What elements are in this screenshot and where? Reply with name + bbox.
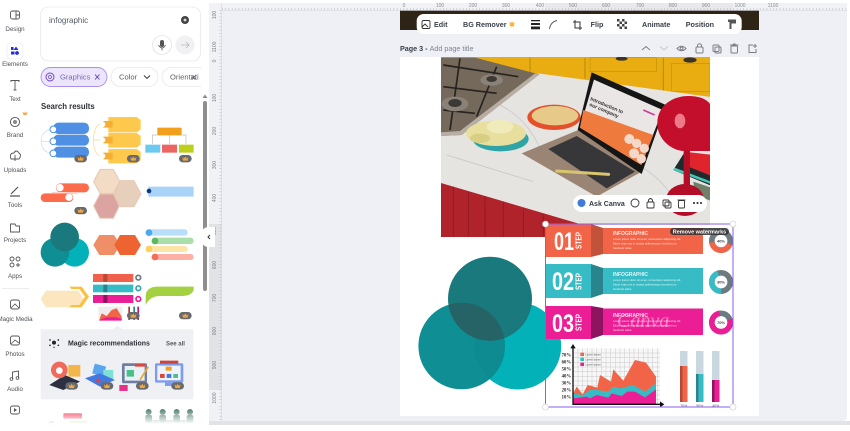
icon: magic sparkle — [49, 339, 59, 348]
left ruler: 200 — [212, 127, 218, 135]
heading: search results: Search results — [41, 102, 95, 111]
panel: magic recommendations — [41, 326, 193, 399]
donut 30%: 30% — [717, 280, 725, 284]
chart legend: Lorem Ipsum — [585, 352, 602, 356]
step 2 banner: INFOGRAPHIC — [613, 272, 648, 278]
top ruler: 800 — [669, 3, 677, 9]
floating toolbar: Animate — [642, 20, 670, 29]
chips plate — [466, 120, 529, 151]
chart legend — [580, 352, 602, 366]
red lamp — [657, 96, 713, 216]
chip: orientation: Orientati — [170, 72, 199, 82]
donut 40%: 40% — [717, 238, 725, 244]
top ruler: 200 — [469, 3, 477, 9]
step 2 banner: STEP — [574, 272, 584, 290]
chip: graphics: Graphics — [60, 72, 91, 82]
left ruler: 100 — [212, 11, 218, 19]
left ruler: 300 — [212, 161, 218, 169]
nav: text: Text — [9, 96, 21, 103]
icon: transparency — [617, 19, 627, 29]
left ruler — [209, 3, 222, 421]
nav: design: Design — [5, 26, 25, 33]
chart y axis labels: 30% — [562, 382, 571, 387]
previous page strip — [400, 11, 759, 30]
left ruler: 700 — [212, 294, 218, 302]
gas stove — [440, 58, 539, 136]
donut 70% — [709, 311, 733, 334]
ask canva toolbar — [573, 195, 707, 212]
search box: infographic — [49, 16, 88, 25]
thumbnail: blue list — [41, 123, 89, 162]
step 1 banner: 01 — [554, 228, 574, 256]
nav: photos — [5, 336, 25, 358]
step 3 banner: Etiam vitae orci in massa pellentesque hendrerit eu — [613, 324, 677, 328]
step 1 banner: hendrerit tellus. — [613, 246, 632, 250]
donut 70%: 70% — [717, 320, 725, 325]
top ruler: 500 — [569, 3, 577, 9]
recommendation: floating screens — [85, 364, 115, 390]
top ruler: 1100 — [768, 3, 779, 9]
left ruler: 100 — [212, 94, 218, 102]
top ruler: 0 — [403, 3, 406, 9]
nav: elements active: Elements — [2, 61, 28, 68]
chart y axis labels: 40% — [562, 375, 571, 380]
thumbnail: blue bar — [147, 187, 194, 197]
navigation rail — [0, 11, 33, 414]
icon: premium crown — [510, 21, 514, 26]
top ruler: 600 — [602, 3, 610, 9]
thumbnail: hex pair — [93, 235, 141, 255]
left ruler: 1100 — [212, 41, 218, 52]
top ruler: 700 — [636, 3, 644, 9]
canva watermark: Canva — [617, 310, 669, 332]
thumbnail: cropped red shapes — [49, 413, 87, 424]
left ruler: 400 — [212, 194, 218, 202]
sidebar panel — [0, 0, 209, 424]
step 1 banner — [546, 224, 703, 257]
step 2 banner: hendrerit tellus. — [613, 287, 632, 291]
icon: crop — [573, 20, 582, 30]
remove watermarks label: Remove watermarks — [673, 230, 726, 236]
donut 30% — [712, 273, 730, 291]
nav: brand: Brand — [7, 132, 24, 139]
nav: uploads — [4, 151, 26, 174]
nav: audio — [7, 371, 23, 393]
left ruler: 500 — [212, 227, 218, 235]
search result thumbnails — [41, 117, 194, 424]
panel collapse tab — [202, 227, 215, 247]
laptop — [522, 72, 666, 197]
step 3 banner: INFOGRAPHIC — [613, 313, 648, 319]
left ruler: 800 — [212, 327, 218, 335]
lower thumbnails group — [41, 223, 194, 424]
thumbnail: venn — [41, 223, 89, 267]
venn diagram — [418, 257, 561, 390]
left ruler: 600 — [212, 261, 218, 269]
step 3 banner — [546, 306, 703, 339]
chip: orientation — [162, 68, 201, 86]
step 3 banner: hendrerit tellus. — [613, 328, 632, 332]
chart y axis labels — [562, 354, 571, 401]
panel: magic recommendations: Magic recommendations — [68, 340, 150, 347]
step 3 banner: 03 — [552, 310, 574, 338]
chart y axis labels: 50% — [562, 368, 571, 373]
left ruler: 1000 — [212, 392, 218, 404]
nav: apps — [8, 257, 22, 280]
top ruler: 900 — [702, 3, 710, 9]
thumbnail: green banner — [146, 287, 194, 319]
laptop: our company — [588, 102, 620, 120]
top ruler: 1000 — [734, 3, 746, 9]
thumbnail: mini infographic — [93, 274, 141, 321]
floating toolbar: Edit — [434, 20, 448, 29]
step 1 banner: STEP — [574, 231, 584, 249]
left ruler: 900 — [212, 361, 218, 369]
nav: projects — [4, 224, 26, 244]
step 3 banner: Lorem ipsum dolor sit amet, consectetur adipiscing elit. — [613, 319, 681, 323]
popcorn plate — [527, 105, 581, 130]
chart legend: Lorem Ipsum — [585, 362, 602, 366]
step 2 banner: Etiam vitae orci in massa pellentesque hendrerit eu — [613, 282, 677, 286]
thumbnail: red pills — [41, 183, 89, 214]
recommendation: megaphone — [49, 362, 80, 390]
nav: projects: Projects — [4, 237, 26, 244]
nav: text — [9, 80, 21, 103]
step 3 banner: STEP — [574, 313, 584, 331]
chip: color: Color — [119, 72, 138, 82]
icon: corner rounding — [550, 20, 557, 29]
scrollbar — [202, 94, 208, 291]
infographic — [546, 224, 733, 408]
chart y axis labels: 20% — [562, 389, 571, 394]
thumbnail: arrow banner — [41, 287, 89, 307]
chip: graphics — [41, 68, 107, 86]
page — [400, 57, 759, 416]
thumbnail: yellow tags — [93, 117, 141, 163]
marble veins — [446, 104, 669, 192]
chart y axis labels: 70% — [562, 354, 571, 359]
bar chart: 40% — [712, 404, 719, 408]
thumbnail: hexagons — [94, 169, 141, 218]
panel: magic recommendations: See all — [166, 341, 185, 347]
nav: apps: Apps — [8, 273, 22, 280]
books — [673, 152, 710, 200]
top ruler: 100 — [436, 3, 444, 9]
icon: paint roller — [728, 20, 736, 29]
step 2 banner: Lorem ipsum dolor sit amet, consectetur adipiscing elit. — [613, 278, 681, 282]
floating toolbar: BG Remover — [463, 20, 507, 29]
nav: magic media — [0, 300, 33, 323]
thumbnail: people silhouettes — [145, 409, 193, 424]
step 2 banner — [546, 264, 703, 298]
bar chart: 50% — [696, 404, 703, 408]
selection frame — [542, 221, 736, 410]
nav: video — [10, 406, 20, 414]
red cabinet — [440, 183, 587, 238]
nav: photos: Photos — [5, 351, 25, 358]
top ruler: 400 — [536, 3, 544, 9]
nav: uploads: Uploads — [4, 167, 26, 174]
bar chart — [680, 351, 720, 408]
icon: edit image — [422, 20, 430, 28]
editor canvas background — [209, 3, 850, 425]
floating toolbar: Flip — [591, 20, 604, 29]
filter chips — [41, 68, 201, 86]
marble counter — [440, 73, 713, 225]
chart y axis labels: 60% — [562, 361, 571, 366]
step 2 banner: 02 — [552, 268, 574, 296]
page action icons — [642, 44, 757, 53]
left ruler: 0 — [212, 59, 218, 62]
donut 40% — [709, 229, 733, 253]
thumbnail: pastel pills — [146, 229, 194, 260]
chart legend: Lorem Ipsum — [585, 357, 602, 361]
ask canva toolbar: Ask Canva — [589, 201, 625, 208]
thumbnail: org chart — [145, 128, 194, 162]
floating toolbar — [417, 14, 742, 34]
chart y axis labels: 10% — [562, 396, 571, 401]
floating toolbar: Position — [686, 20, 714, 29]
nav: tools — [8, 187, 22, 209]
nav: brand — [7, 111, 28, 139]
nav: elements active — [2, 43, 28, 68]
icon: stroke style — [531, 20, 540, 29]
top ruler: 300 — [502, 3, 510, 9]
yellow cabinets — [441, 57, 710, 97]
nav: design — [5, 11, 25, 33]
step 1 banner: Lorem ipsum dolor sit amet, consectetur adipiscing elit. — [613, 237, 681, 241]
laptop: Introduction to — [589, 96, 624, 116]
step 1 banner: INFOGRAPHIC — [613, 231, 648, 237]
bar chart: 70% — [680, 404, 687, 408]
area chart — [562, 344, 664, 407]
chip: color — [111, 68, 158, 86]
nav: audio: Audio — [7, 386, 23, 393]
step 1 banner: Etiam vitae orci in massa pellentesque hendrerit eu — [613, 242, 677, 246]
top ruler — [222, 3, 847, 10]
recommendation: monitor — [119, 363, 149, 391]
page header: page title: Page 3 - Add page title — [400, 44, 474, 53]
search box — [40, 7, 200, 61]
panel bottom fade — [35, 408, 205, 424]
photo: laptop on kitchen counter — [440, 55, 713, 238]
nav: tools: Tools — [8, 202, 22, 209]
recommendation: org monitor — [155, 361, 184, 390]
